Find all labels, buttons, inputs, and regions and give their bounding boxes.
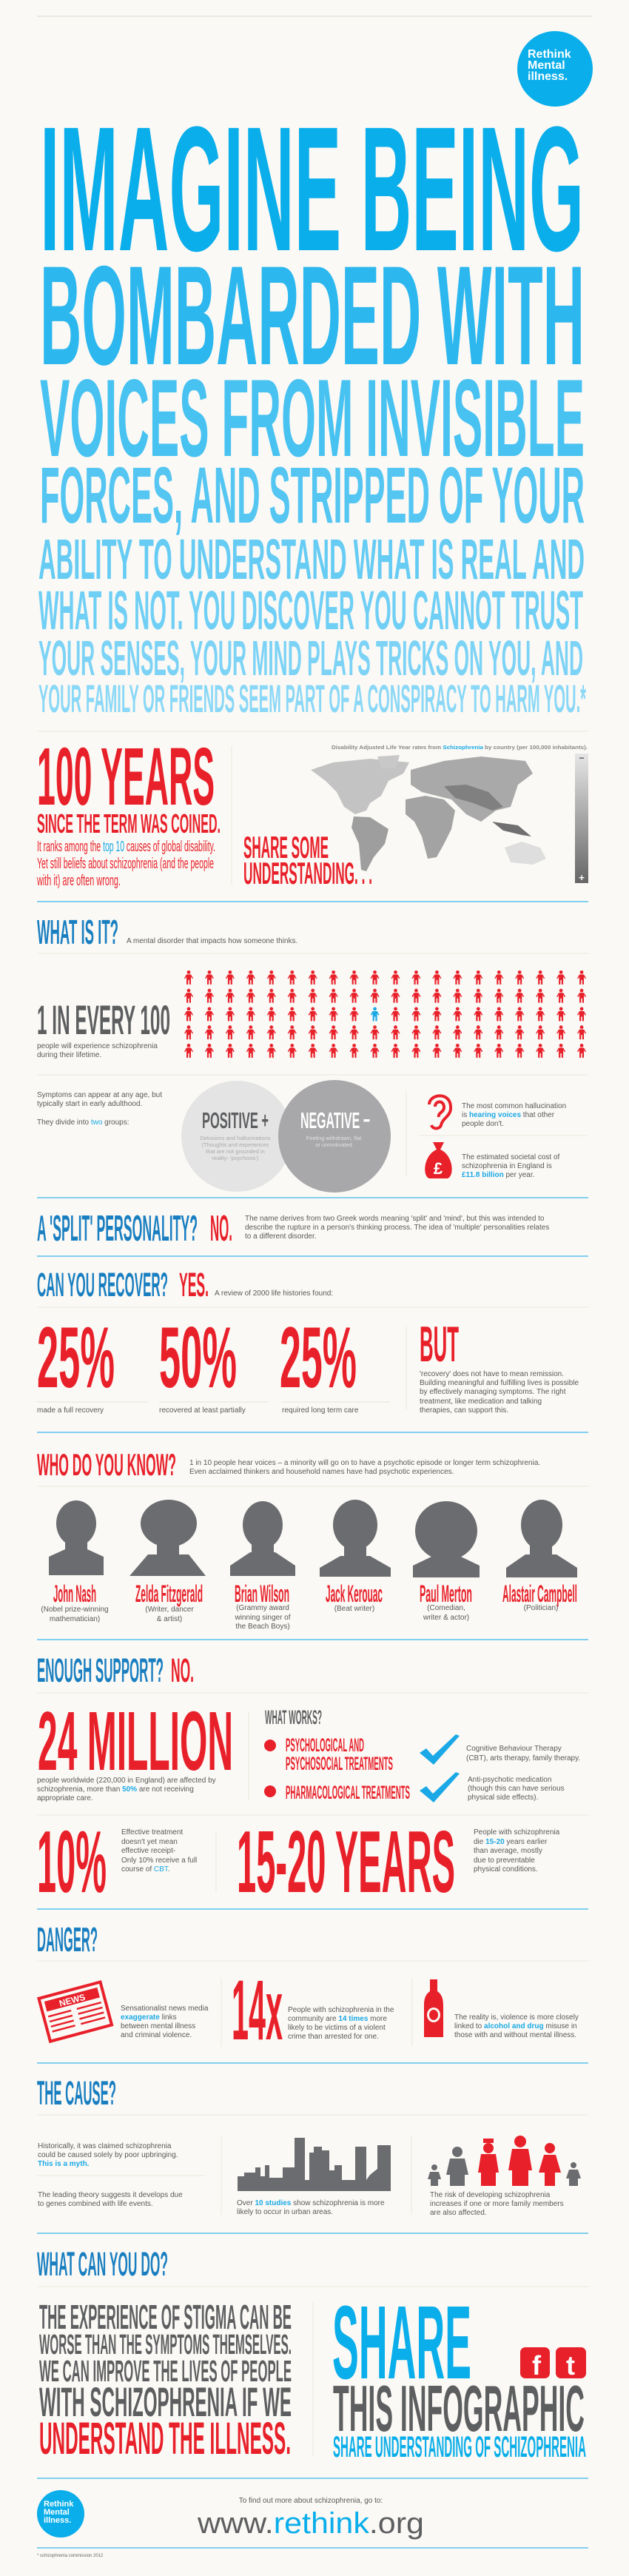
text: UNDERSTANDING. . . xyxy=(243,856,372,890)
names and roles: writer & actor) xyxy=(423,1614,469,1622)
names and roles: (Grammy award xyxy=(236,1604,289,1612)
names and roles: Zelda Fitzgerald xyxy=(135,1580,203,1607)
text: alcohol: linked to alcohol and drug misuse in xyxy=(454,2022,577,2030)
stat: 50% partial xyxy=(159,1309,269,1415)
logo: Rethink Mental Illness top: Rethink xyxy=(528,48,571,61)
text: cost: schizophrenia in England is xyxy=(462,1162,552,1170)
text: cost: £11.8 billion per year. xyxy=(462,1171,534,1179)
text: split explanation: The name derives from two Greek words meaning 'split' and 'mind', but this was intended to xyxy=(245,1215,545,1223)
stat: 15-20 years: physical conditions. xyxy=(474,1865,538,1874)
stat: 14x: likely to be victims of a violent xyxy=(288,2024,386,2032)
stat: 10%: course of CBT. xyxy=(121,1865,170,1874)
text block: stigma xyxy=(39,2298,292,2463)
stat: 15-20 years: People with schizophrenia xyxy=(474,1828,560,1837)
text: WHAT CAN YOU DO? xyxy=(37,2245,168,2283)
stat: 14x: 14x xyxy=(232,1963,283,2058)
icon: check marks xyxy=(420,1734,460,1802)
logo: footer: Rethink xyxy=(44,2500,74,2509)
heading: what is it: A mental disorder that impacts how someone thinks. xyxy=(127,937,297,945)
logo: Rethink Mental Illness top: illness. xyxy=(528,70,568,83)
stat: 50% partial: recovered at least partially xyxy=(159,1406,246,1415)
text: treatments: (though this can have serious xyxy=(468,1785,565,1793)
logo: Rethink Mental Illness top: Mental xyxy=(528,59,565,72)
text: urban: likely to occur in urban areas. xyxy=(237,2208,333,2216)
heading: who do you know: Even acclaimed thinkers and household names have had psychotic experiences. xyxy=(189,1468,454,1476)
circles: positive / negative: POSITIVE + xyxy=(202,1107,269,1133)
text: hallucination xyxy=(462,1102,566,1128)
stat: 24 million: schizophrenia, more than 50% are not receiving xyxy=(37,1785,194,1794)
text: family risk: increases if one or more family members xyxy=(430,2200,564,2208)
map legend xyxy=(575,753,588,883)
stat: 15-20 years: die 15-20 years earlier xyxy=(474,1838,548,1846)
heading: what is it: WHAT IS IT? xyxy=(37,913,118,951)
names and roles: Jack Kerouac xyxy=(326,1580,383,1607)
text: upbringing myth xyxy=(37,2142,204,2208)
text: treatments: physical side effects). xyxy=(468,1794,538,1802)
map legend: − xyxy=(579,753,585,763)
stat: 14x: crime than arrested for one. xyxy=(288,2033,379,2041)
text: split explanation: describe the rupture in a person's thinking process. The idea of 'multiple' personalities relates xyxy=(245,1224,549,1232)
icon: newspaper: NEWS xyxy=(58,1992,87,2009)
stat: 24 million: appropriate care. xyxy=(37,1794,93,1802)
panel: what works xyxy=(264,1706,410,1803)
text: family risk: The risk of developing schizophrenia xyxy=(430,2191,551,2199)
stat: 24 million xyxy=(37,1694,233,1802)
stat: 25% full recovery: 25% xyxy=(37,1309,115,1406)
stat: 1 in every 100 xyxy=(37,996,170,1059)
logo: footer: Mental xyxy=(44,2508,70,2517)
text: treatments: Anti-psychotic medication xyxy=(468,1776,551,1784)
text: hallucination: people don't. xyxy=(462,1120,504,1128)
text: ENOUGH SUPPORT? xyxy=(37,1651,164,1689)
callout: but: treatment, like medication and talking xyxy=(420,1398,542,1406)
text: news media: between mental illness xyxy=(121,2022,195,2030)
stat: 10%: Only 10% receive a full xyxy=(121,1856,197,1865)
panel: 100 years: with it) are often wrong. xyxy=(36,873,121,889)
names and roles: winning singer of xyxy=(234,1614,291,1622)
names and roles: Brian Wilson xyxy=(235,1580,289,1607)
text: PSYCHOSOCIAL TREATMENTS xyxy=(286,1754,393,1774)
panel: 100 years: It ranks among the top 10 causes of global disability. xyxy=(37,839,215,855)
text: symptoms xyxy=(37,1091,162,1127)
circles: positive / negative: Delusions and hallucinations xyxy=(200,1135,271,1141)
icon: facebook: f xyxy=(532,2350,542,2381)
circles: positive / negative: (Thoughts and experiences xyxy=(202,1141,269,1148)
stat: 25% full recovery xyxy=(37,1309,148,1415)
names and roles: (Writer, dancer xyxy=(145,1606,194,1614)
callout: but: BUT xyxy=(420,1316,459,1372)
text: share some understanding: SHARE SOME xyxy=(243,830,329,865)
stat: 14x: community are 14 times more xyxy=(288,2015,387,2023)
text: 1 IN EVERY 100 xyxy=(37,996,170,1043)
circles: positive / negative: reality- 'psychosis') xyxy=(212,1155,259,1161)
text: NO. xyxy=(210,1209,232,1249)
icon: money bag xyxy=(425,1142,452,1178)
text: urban: Over 10 studies show schizophrenia is more xyxy=(237,2199,385,2207)
stat: 14x: People with schizophrenia in the xyxy=(288,2006,394,2014)
icon: bottle xyxy=(424,1979,443,2037)
text: upbringing myth: to genes combined with life events. xyxy=(38,2200,153,2208)
icon: twitter xyxy=(556,2347,586,2381)
heading: can you recover: A review of 2000 life histories found: xyxy=(215,1289,333,1298)
heading: who do you know: 1 in 10 people hear voices – a minority will go on to have a psychotic episode or longer term schizophrenia. xyxy=(189,1459,540,1467)
text: alcohol: those with and without mental illness. xyxy=(454,2031,576,2039)
text: alcohol: The reality is, violence is more closely xyxy=(454,2013,579,2022)
circles: positive / negative: that are not grounded in xyxy=(206,1148,265,1155)
names and roles: the Beach Boys) xyxy=(235,1623,290,1631)
names and roles: mathematician) xyxy=(50,1615,100,1623)
heading: who do you know: WHO DO YOU KNOW? xyxy=(37,1447,176,1482)
stat: 10%: effective receipt- xyxy=(121,1847,175,1855)
names and roles: (Beat writer) xyxy=(334,1605,374,1613)
stat: 25% long term care xyxy=(280,1309,390,1415)
names and roles: (Comedian, xyxy=(427,1604,465,1612)
world map xyxy=(311,755,546,871)
stat: 1 in every 100: people will experience schizophrenia xyxy=(37,1042,158,1050)
text: upbringing myth: could be caused solely by poor upbringing. xyxy=(38,2151,178,2159)
text: 24 MILLION xyxy=(38,1694,233,1788)
icon: newspaper xyxy=(38,1982,112,2042)
text: news media: and criminal violence. xyxy=(121,2031,192,2039)
text: family risk: are also affected. xyxy=(430,2209,487,2217)
names and roles: & artist) xyxy=(157,1615,182,1623)
icon: ear xyxy=(429,1096,451,1128)
text: NO. xyxy=(171,1651,194,1689)
heading: can you recover: YES. xyxy=(179,1266,209,1304)
text: treatments: (CBT), arts therapy, family therapy. xyxy=(466,1754,580,1762)
circles: positive / negative: NEGATIVE − xyxy=(300,1107,370,1133)
text: share some understanding xyxy=(243,830,372,890)
panel: what works: WHAT WORKS? xyxy=(265,1706,322,1728)
callout: but: 'recovery' does not have to mean remission. xyxy=(420,1370,564,1378)
icon: money bag: £ xyxy=(434,1159,443,1178)
heading: split personality xyxy=(37,1209,232,1249)
callout: but: therapies, can support this. xyxy=(420,1406,508,1415)
footnote: * schizophrenia commission 2012 xyxy=(37,2554,104,2558)
stat: 25% long term care: required long term care xyxy=(282,1406,359,1415)
map legend: + xyxy=(579,872,585,883)
text: SINCE THE TERM WAS COINED. xyxy=(37,808,221,839)
text: symptoms: typically start in early adulthood. xyxy=(37,1100,142,1108)
names and roles: (Politician) xyxy=(524,1604,558,1612)
text: A 'SPLIT' PERSONALITY? xyxy=(37,1209,198,1249)
panel: 100 years: Yet still beliefs about schizophrenia (and the people xyxy=(37,856,214,872)
logo: Rethink Mental Illness top xyxy=(517,31,593,107)
callout: but: Building meaningful and fulfilling lives is possible xyxy=(420,1379,579,1387)
stat: 10%: doesn't yet mean xyxy=(121,1838,178,1846)
panel: 100 years xyxy=(36,731,221,889)
names and roles: Paul Merton xyxy=(420,1580,472,1607)
text: alcohol xyxy=(454,2013,579,2039)
stat: 25% full recovery: made a full recovery xyxy=(37,1406,104,1415)
text: PHARMACOLOGICAL TREATMENTS xyxy=(286,1782,410,1803)
text: news media xyxy=(121,2005,209,2039)
stat: 15-20 years: due to preventable xyxy=(474,1856,535,1865)
text: treatments: Cognitive Behaviour Therapy xyxy=(466,1745,562,1753)
heading: enough support xyxy=(37,1651,194,1689)
text: upbringing myth: Historically, it was claimed schizophrenia xyxy=(38,2142,172,2150)
text: THE CAUSE? xyxy=(37,2074,116,2112)
icon: twitter: t xyxy=(566,2350,575,2381)
logo: footer xyxy=(37,2490,84,2538)
text: hallucination: The most common hallucination xyxy=(462,1102,566,1110)
text: cost xyxy=(462,1153,560,1179)
text: WITH SCHIZOPHRENIA IF WE xyxy=(39,2378,292,2425)
text: news media: exaggerate links xyxy=(121,2013,177,2022)
icon: facebook xyxy=(520,2347,550,2381)
logo: footer: illness. xyxy=(44,2516,71,2525)
stat: 24 million: people worldwide (220,000 in England) are affected by xyxy=(37,1777,216,1785)
share this infographic xyxy=(332,2284,586,2463)
map caption: Disability Adjusted Life Year rates from Schizophrenia by country (per 100,000 inhabitants). xyxy=(332,744,588,751)
callout: but: by effectively managing symptoms. The right xyxy=(420,1388,566,1396)
stat: 10%: Effective treatment xyxy=(121,1828,183,1837)
stat: 15-20 years: than average, mostly xyxy=(474,1847,542,1855)
panel: what works: PSYCHOLOGICAL AND xyxy=(286,1735,364,1756)
circles: positive / negative xyxy=(181,1080,391,1193)
stat: 10%: 10% xyxy=(37,1813,107,1911)
names and roles xyxy=(41,1580,577,1631)
circles: positive / negative: Feeling withdrawn, flat xyxy=(306,1135,362,1141)
text: news media: Sensationalist news media xyxy=(121,2005,209,2013)
text: symptoms: Symptoms can appear at any age, but xyxy=(37,1091,162,1099)
people grid chart xyxy=(184,970,598,1062)
text: DANGER? xyxy=(37,1920,98,1959)
text: family risk xyxy=(430,2191,564,2217)
text: upbringing myth: The leading theory suggests it develops due xyxy=(38,2191,183,2199)
stat: 1 in every 100: during their lifetime. xyxy=(37,1051,101,1059)
text: symptoms: They divide into two groups: xyxy=(37,1118,130,1127)
names and roles: (Nobel prize-winning xyxy=(41,1606,109,1614)
icon: family xyxy=(428,2136,581,2186)
text: treatments xyxy=(466,1745,580,1802)
silhouettes row xyxy=(49,1500,577,1577)
stat: 25% long term care: 25% xyxy=(280,1309,357,1406)
text: urban xyxy=(237,2199,385,2216)
footer: website: www.rethink.org xyxy=(197,2507,424,2540)
headline xyxy=(38,90,586,721)
text: cost: The estimated societal cost of xyxy=(462,1153,560,1161)
text: hallucination: is hearing voices that other xyxy=(462,1111,555,1119)
text: 100 YEARS xyxy=(37,731,215,822)
stat: 50% partial: 50% xyxy=(159,1309,237,1406)
heading: can you recover: CAN YOU RECOVER? xyxy=(37,1266,168,1304)
icon: city skyline xyxy=(238,2138,391,2191)
text: split explanation xyxy=(245,1215,549,1241)
text: split explanation: to a different disorder. xyxy=(245,1232,317,1241)
circles: positive / negative: or unmotivated xyxy=(315,1141,352,1148)
text: upbringing myth: This is a myth. xyxy=(38,2160,90,2168)
footer: website: To find out more about schizophrenia, go to: xyxy=(239,2497,383,2505)
heading: who do you know xyxy=(37,1447,540,1482)
names and roles: John Nash xyxy=(53,1580,96,1607)
callout: but xyxy=(420,1316,579,1415)
